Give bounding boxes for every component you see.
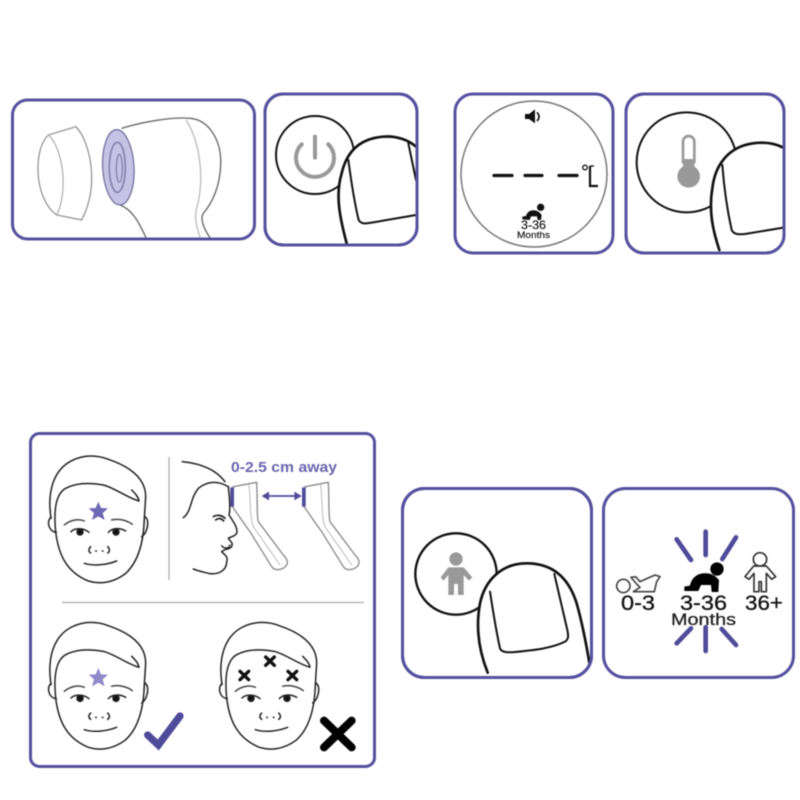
- panel: press temperature button: [626, 94, 784, 253]
- icon: degree celsius: [583, 165, 598, 186]
- profile of child: [182, 462, 237, 574]
- panel: display readout: [455, 94, 613, 253]
- age labels: Months: [671, 610, 736, 629]
- panel: press age button: [402, 488, 592, 678]
- age labels: 0-3: [621, 592, 655, 615]
- icon: speaker: [525, 109, 539, 123]
- face with star target: [49, 456, 148, 583]
- icon: crawling baby: [684, 562, 724, 592]
- icon: thermometer head with lens: [101, 118, 221, 238]
- age label: Months: [517, 230, 550, 241]
- icon: child button: [415, 533, 497, 615]
- panel: measurement position: [30, 434, 374, 766]
- age label: [517, 220, 550, 241]
- vertical divider line: [168, 457, 170, 580]
- icon: check mark: [148, 716, 180, 745]
- panel: age mode selection: [604, 488, 794, 678]
- age labels: 3-36: [680, 592, 727, 615]
- panel: press power button: [265, 94, 417, 245]
- icon: lying infant: [617, 575, 660, 593]
- icon: probe cap: [38, 127, 92, 220]
- incorrect face: [220, 622, 319, 749]
- panel: remove probe cap: [12, 100, 254, 239]
- double arrow: [262, 492, 302, 500]
- icon: finger pressing: [711, 143, 783, 250]
- icon: large cross: [324, 721, 352, 747]
- icon: crawling baby: [522, 204, 544, 220]
- correct face with star: [49, 622, 148, 749]
- small wrong-location crosses: [240, 657, 297, 680]
- age labels: [621, 592, 783, 629]
- highlight rays: [677, 532, 736, 651]
- icon: finger pressing: [478, 563, 589, 673]
- icon: older child: [745, 553, 776, 592]
- dashes reading: [494, 174, 577, 177]
- horizontal divider line: [62, 602, 364, 604]
- icon: finger pressing: [339, 137, 416, 243]
- age label: 3-36: [521, 220, 546, 232]
- icon: thermometer button: [637, 112, 737, 212]
- thermometer near forehead: [230, 482, 287, 570]
- thermometer at distance: [302, 482, 359, 570]
- icon: power button: [276, 116, 354, 194]
- distance label: 0-2.5 cm away: [231, 460, 337, 476]
- age labels: 36+: [745, 592, 783, 615]
- display circle: [461, 101, 607, 247]
